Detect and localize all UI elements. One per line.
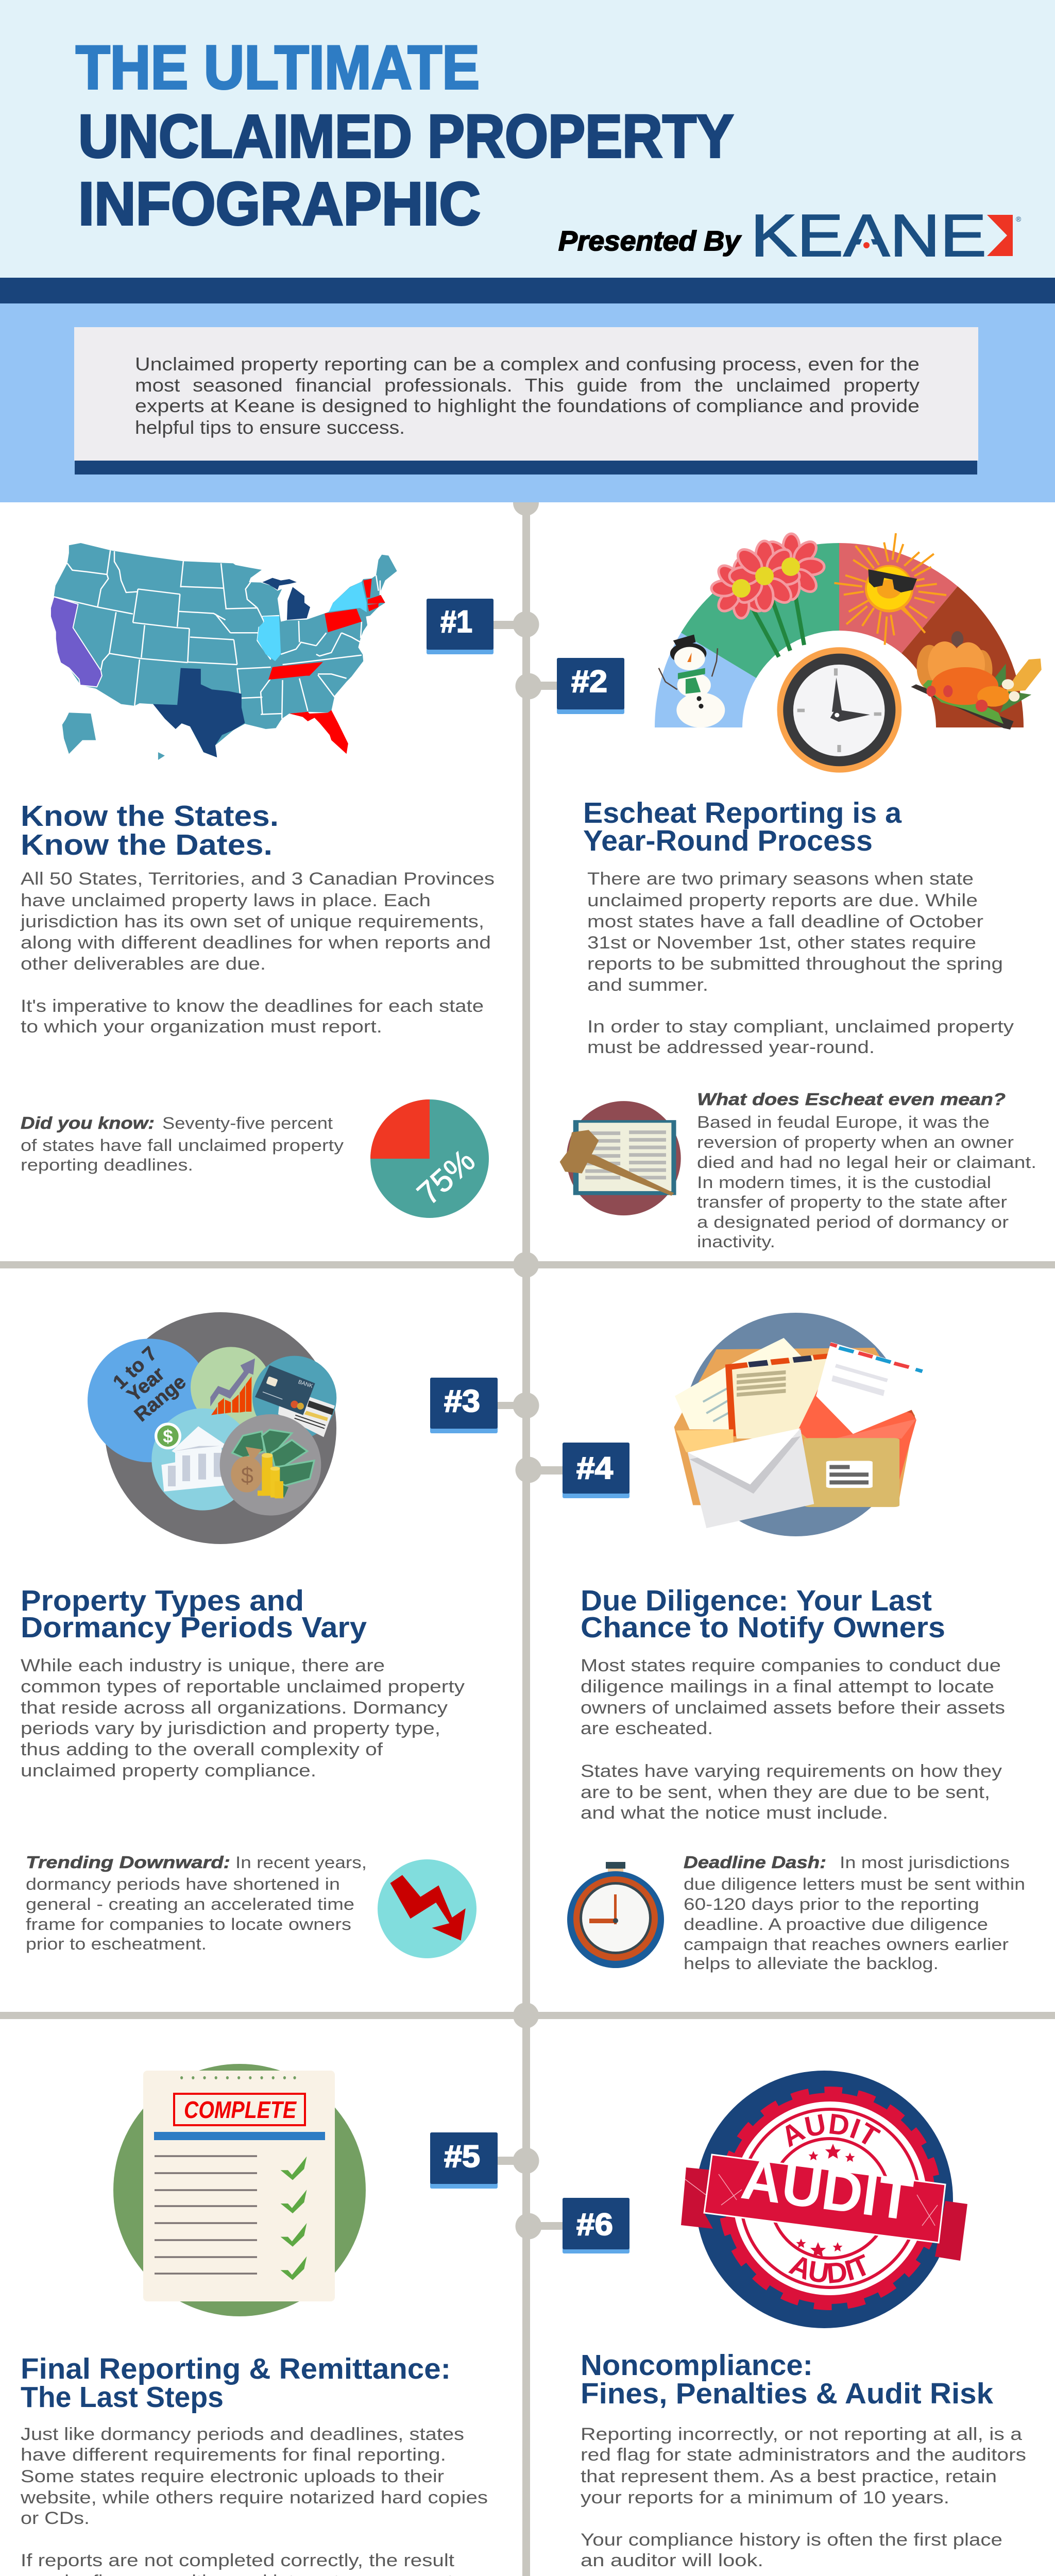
body text	[20, 2425, 488, 2576]
body text: thus adding to the overall complexity of	[21, 1740, 383, 1759]
number badge #2: #2	[571, 664, 607, 699]
callout: did you know: Seventy-five percent	[162, 1114, 333, 1132]
body text: Your compliance history is often the first place	[581, 2530, 1002, 2550]
icon: property types circles	[88, 1312, 336, 1544]
panel: #3 Property Types	[21, 1312, 539, 1958]
body text: It's imperative to know the deadlines for each state	[21, 996, 484, 1016]
chart: 75% pie	[370, 1099, 489, 1218]
panel: #6 Noncompliance	[515, 2071, 1026, 2570]
sun with sunglasses	[835, 533, 946, 645]
body text: an auditor will look.	[581, 2551, 763, 2570]
complete stamp: COMPLETE	[184, 2096, 297, 2123]
callout: what does escheat mean: In modern times, it is the custodial	[697, 1173, 991, 1192]
callout: deadline dash: due diligence letters must be sent within	[684, 1875, 1025, 1893]
body text: unclaimed property compliance.	[21, 1761, 316, 1781]
snowman	[659, 635, 725, 727]
icon: seasons arc with clock	[655, 533, 1042, 773]
body text: There are two primary seasons when state	[587, 869, 974, 889]
chart arrow	[210, 1359, 255, 1415]
body text: or CDs.	[21, 2509, 90, 2528]
callout: trending downward: In recent years,	[235, 1853, 367, 1872]
heading	[581, 2349, 993, 2410]
callout: did you know	[21, 1113, 344, 1174]
callout: what does escheat mean: died and had no legal heir or claimant.	[697, 1153, 1036, 1172]
ribbon	[681, 2146, 967, 2261]
number badge #6	[515, 2198, 629, 2253]
clock	[777, 647, 901, 773]
number badge #5: #5	[444, 2139, 480, 2174]
body text: 31st or November 1st, other states require	[587, 933, 976, 953]
callout: what does escheat mean: reversion of property when an owner	[697, 1133, 1014, 1151]
body text: most states have a fall deadline of October	[587, 912, 983, 931]
callout: deadline dash: 60-120 days prior to the reporting	[684, 1895, 979, 1913]
body text: owners of unclaimed assets before their assets	[581, 1698, 1005, 1718]
body text: your reports for a minimum of 10 years.	[581, 2488, 949, 2507]
header banner	[0, 0, 1055, 278]
body text: that reside across all organizations. Dormancy	[21, 1698, 448, 1718]
money bag and coins: $	[241, 1463, 253, 1488]
callout: trending downward: frame for companies to locate owners	[26, 1915, 351, 1934]
heading: Final Reporting & Remittance:	[21, 2352, 451, 2385]
callout: what does escheat mean: transfer of property to the state after	[697, 1193, 1007, 1211]
callout: what does escheat mean: a designated period of dormancy or	[697, 1213, 1009, 1231]
body text: are escheated.	[581, 1719, 713, 1738]
body text: have unclaimed property laws in place. Each	[21, 891, 431, 910]
callout: what does escheat mean: inactivity.	[697, 1232, 775, 1251]
body text: common types of reportable unclaimed property	[21, 1677, 465, 1697]
body text: Just like dormancy periods and deadlines, states	[21, 2425, 464, 2444]
money bag and coins	[231, 1430, 314, 1498]
number badge #5	[430, 2132, 539, 2189]
body text: website, while others require notarized hard copies	[20, 2488, 488, 2507]
heading	[21, 2352, 451, 2414]
callout: what does escheat mean: What does Escheat even mean?	[697, 1090, 1006, 1109]
number badge #6: #6	[576, 2207, 613, 2242]
arc labels: AUDIT	[786, 2113, 881, 2147]
heading	[21, 800, 279, 861]
heading	[21, 1584, 367, 1644]
callout: trending downward: prior to escheatment.	[26, 1935, 207, 1953]
body text: While each industry is unique, there are	[21, 1656, 385, 1675]
panel: #4 Due Diligence	[515, 1313, 1025, 1973]
callout: did you know: Did you know:	[21, 1113, 155, 1132]
body text: reports to be submitted throughout the spring	[587, 954, 1003, 974]
arc labels: AUDIT	[788, 2254, 866, 2283]
callout: what does escheat mean	[697, 1090, 1036, 1251]
body text: along with different deadlines for when reports and	[21, 933, 491, 953]
title: INFOGRAPHIC	[78, 170, 481, 238]
icon: completed checklist	[113, 2064, 366, 2316]
title	[76, 33, 734, 238]
presented by: Presented By	[558, 226, 742, 257]
heading	[581, 1584, 945, 1644]
body text: Most states require companies to conduct due	[581, 1656, 1001, 1675]
icon: mail and envelopes	[674, 1313, 923, 1536]
body text: diligence mailings in a final attempt to locate	[581, 1677, 994, 1697]
body text: unclaimed property reports are due. While	[587, 891, 978, 910]
panel: #1 Know the States	[20, 543, 539, 1218]
body text: that represent them. As a best practice, retain	[581, 2467, 997, 2486]
season arc	[655, 543, 1024, 727]
heading: Escheat Reporting is a	[583, 796, 902, 829]
callout: did you know: of states have fall unclaimed property	[21, 1136, 344, 1155]
number badge #1: #1	[440, 604, 472, 639]
range label	[109, 1343, 190, 1426]
body text: jurisdiction has its own set of unique requirements,	[20, 912, 484, 931]
logo: Keane: KEANE	[751, 202, 986, 269]
arc labels	[786, 2113, 881, 2283]
icon: stopwatch	[567, 1862, 664, 1968]
callout: deadline dash: campaign that reaches owners earlier	[684, 1935, 1009, 1954]
panel: intro text box: Unclaimed property reporting can be a complex and confusing process, even for the	[135, 353, 920, 375]
heading: Chance to Notify Owners	[581, 1611, 945, 1644]
callout: deadline dash: Deadline Dash:	[684, 1853, 826, 1872]
body text: have different requirements for final reporting.	[21, 2445, 446, 2465]
callout: did you know: reporting deadlines.	[21, 1156, 193, 1174]
callout: deadline dash: deadline. A proactive due diligence	[684, 1915, 988, 1934]
icon: audit stamp	[681, 2071, 967, 2328]
title: UNCLAIMED PROPERTY	[78, 103, 734, 171]
panel: intro text box: helpful tips to ensure success.	[135, 417, 405, 438]
icon: book and gavel	[560, 1101, 681, 1215]
body text: and summer.	[587, 975, 708, 995]
heading: Know the Dates.	[21, 828, 273, 861]
range label: Year	[123, 1363, 169, 1406]
icon: downward trend arrow	[378, 1859, 477, 1958]
body text: and what the notice must include.	[581, 1803, 888, 1823]
bank building	[155, 1422, 225, 1492]
callout: trending downward	[26, 1853, 367, 1953]
panel: intro text box: most seasoned financial professionals. This guide from the unclaimed property	[135, 375, 920, 396]
callout: deadline dash: helps to alleviate the backlog.	[684, 1954, 939, 1973]
number badge #4	[515, 1443, 629, 1498]
heading: Fines, Penalties & Audit Risk	[581, 2377, 993, 2410]
callout: trending downward: general - creating an accelerated time	[26, 1895, 354, 1913]
heading: Dormancy Periods Vary	[21, 1611, 367, 1644]
callout: trending downward: dormancy periods have shortened in	[26, 1875, 340, 1893]
heading: Due Diligence: Your Last	[581, 1584, 932, 1617]
intro band	[0, 278, 1055, 502]
bank cards: BANK	[297, 1379, 314, 1389]
heading: Property Types and	[21, 1584, 304, 1617]
flowers	[711, 534, 824, 657]
body text: Reporting incorrectly, or not reporting at all, is a	[581, 2425, 1022, 2444]
range label: 1 to 7	[109, 1343, 161, 1394]
panel: #5 Final Reporting	[20, 2064, 539, 2576]
number badge #3	[430, 1378, 539, 1433]
icon: US map	[50, 543, 397, 760]
bank cards	[255, 1365, 335, 1437]
body text	[581, 1656, 1005, 1823]
number badge #2	[515, 658, 624, 714]
callout: trending downward: Trending Downward:	[26, 1853, 230, 1872]
heading: Year-Round Process	[583, 824, 873, 857]
body text: Some states require electronic uploads to their	[21, 2467, 444, 2486]
ribbon: AUDIT	[738, 2146, 916, 2232]
body text	[587, 869, 1014, 1057]
heading: The Last Steps	[21, 2381, 224, 2414]
range label: Range	[130, 1371, 190, 1426]
chart: 75% pie: 75%	[411, 1143, 482, 1212]
body text: In order to stay compliant, unclaimed property	[587, 1017, 1014, 1037]
body text: other deliverables are due.	[21, 954, 266, 974]
body text: are to be sent, when they are due to be sent,	[581, 1783, 990, 1802]
body text: to which your organization must report.	[21, 1017, 382, 1037]
heading: Know the States.	[21, 800, 279, 833]
heading: Noncompliance:	[581, 2349, 813, 2382]
callout: deadline dash	[684, 1853, 1025, 1973]
body text: States have varying requirements on how they	[581, 1761, 1002, 1781]
body text	[21, 1656, 465, 1781]
heading	[583, 796, 902, 857]
body text: All 50 States, Territories, and 3 Canadian Provinces	[21, 869, 495, 889]
thanksgiving food	[911, 631, 1042, 730]
body text: periods vary by jurisdiction and property type,	[21, 1719, 440, 1738]
logo: Keane: ®	[1016, 215, 1022, 223]
body text	[20, 869, 495, 1037]
body text: must be addressed year-round.	[587, 1038, 875, 1057]
number badge #4: #4	[576, 1451, 614, 1485]
body text: If reports are not completed correctly, the result	[21, 2551, 455, 2570]
callout: what does escheat mean: Based in feudal Europe, it was the	[697, 1113, 990, 1131]
number badge #3: #3	[444, 1384, 480, 1418]
panel: #2 Escheat Reporting	[515, 533, 1042, 1251]
title: THE ULTIMATE	[76, 33, 480, 102]
number badge #1	[427, 599, 539, 654]
callout: deadline dash: In most jurisdictions	[840, 1853, 1010, 1872]
body text: red flag for state administrators and the auditors	[581, 2445, 1026, 2465]
body text	[581, 2425, 1026, 2570]
panel: intro text box	[74, 327, 978, 474]
bank building: $	[163, 1427, 173, 1447]
panel: intro text box: experts at Keane is designed to highlight the foundations of compliance and provide	[135, 395, 920, 416]
